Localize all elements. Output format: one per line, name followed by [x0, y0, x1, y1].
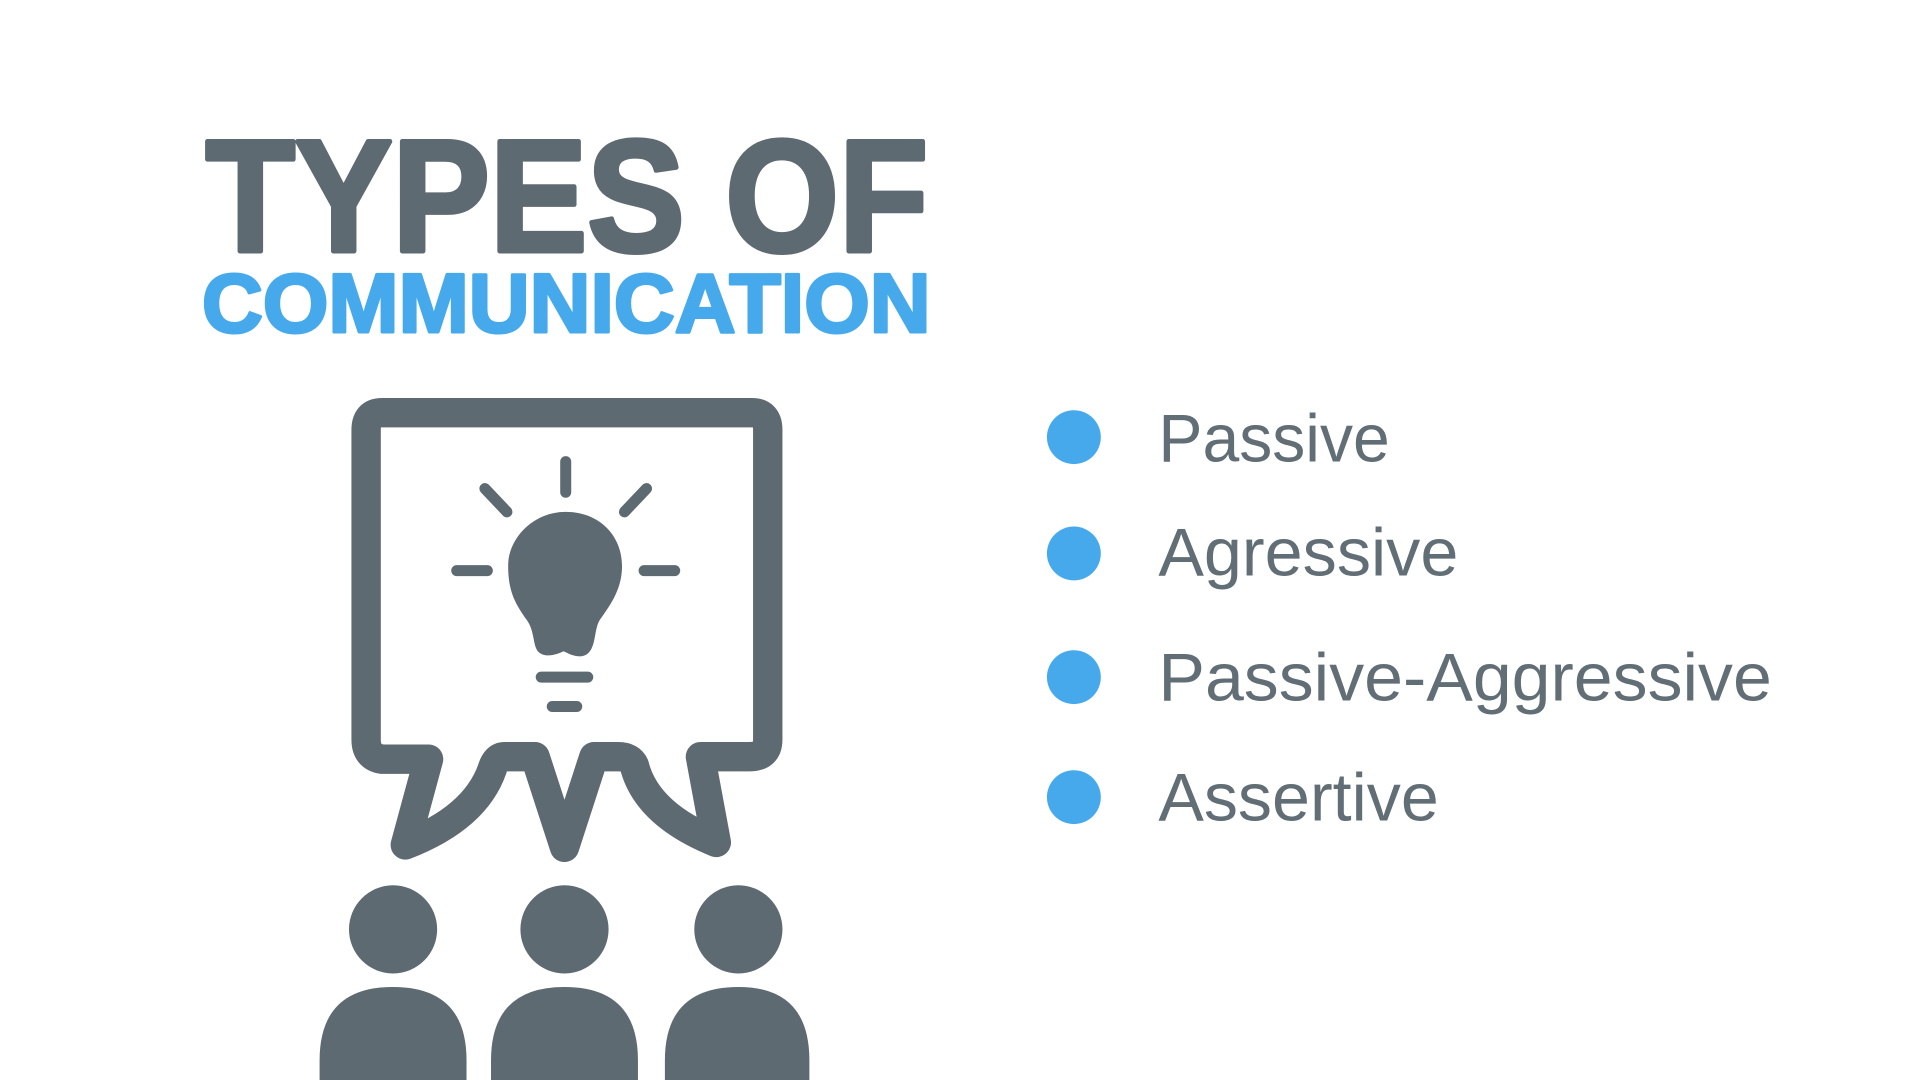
icon: people [320, 885, 809, 1080]
person 1 [320, 885, 467, 1080]
person 2 [491, 885, 638, 1080]
item: Assertive: Assertive [1158, 760, 1439, 835]
title line 1: TYPES OF [206, 107, 928, 285]
item: Passive [1047, 402, 1390, 477]
lightbulb [457, 462, 675, 707]
person 3 [665, 885, 809, 1080]
list: communication types [1047, 402, 1772, 835]
title line 2: COMMUNICATION [202, 257, 931, 350]
icon: speech bubble with lightbulb [366, 413, 768, 847]
speech bubble [366, 413, 768, 847]
item: Passive-Aggressive: Passive-Aggressive [1158, 640, 1772, 715]
item: Passive: Passive [1158, 402, 1390, 477]
item: Agressive: Agressive [1158, 516, 1458, 591]
title [202, 107, 931, 350]
